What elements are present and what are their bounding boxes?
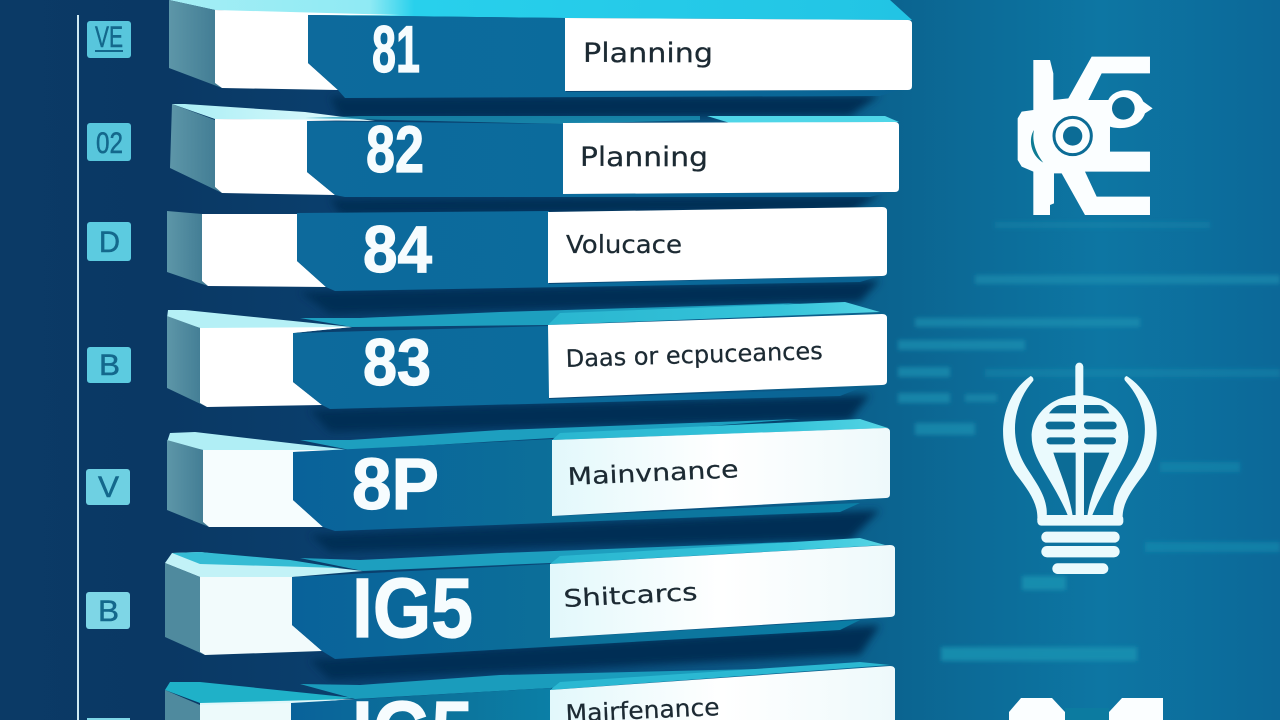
white left block: [203, 450, 350, 527]
blue number band: [292, 564, 860, 659]
icon tile 1: [87, 21, 131, 58]
label: Volucace: [566, 230, 682, 259]
white label panel: [552, 428, 890, 516]
white left block: [200, 703, 291, 720]
side face: [167, 440, 209, 527]
label: Planning: [583, 38, 713, 69]
side face: [167, 316, 207, 407]
bar 2: [170, 104, 899, 214]
icon tile 3: D: [99, 226, 120, 259]
side face: [165, 563, 205, 655]
icon: gear K-E mark: [1018, 57, 1153, 215]
icon tile 5: V: [98, 471, 119, 504]
icon tile 1: VE: [95, 21, 123, 54]
side face: [165, 690, 200, 720]
icon tile 2: 02: [96, 127, 123, 160]
bar 3: [167, 207, 887, 314]
white left block: [215, 119, 370, 195]
side face: [170, 104, 222, 193]
white label panel: [563, 122, 899, 194]
label: Daas or ecpuceances: [565, 337, 823, 373]
number: 83: [363, 325, 431, 399]
decorative blurred data lines: [898, 222, 1280, 661]
outer right arc: [1113, 376, 1157, 520]
blue number band: [293, 439, 860, 531]
blue number band: [293, 326, 860, 409]
label: Mainvnance: [567, 455, 739, 491]
bar 4: [167, 302, 887, 432]
icon tile 7: [87, 718, 130, 720]
bar 1: [169, 0, 912, 118]
side face: [167, 211, 208, 286]
icon tile 6: B: [98, 595, 119, 628]
white label panel: [550, 666, 895, 720]
blue number band: [297, 211, 880, 291]
white label panel: [548, 207, 887, 283]
icon tile 3: [87, 222, 131, 261]
number: 8P: [352, 445, 439, 525]
bulb body with slots: [1032, 395, 1128, 517]
white left block: [215, 10, 400, 90]
blue number band: [307, 121, 890, 197]
side face: [169, 0, 222, 88]
icon tile 4: [87, 347, 131, 383]
outer left arc: [1003, 376, 1047, 520]
icon tile 6: [86, 592, 130, 629]
timeline rule: [77, 15, 79, 720]
top face: [172, 104, 375, 121]
bar 5: [167, 419, 890, 552]
icon tile 4: B: [99, 349, 120, 382]
label: Shitcarcs: [563, 578, 698, 613]
top face: [165, 682, 355, 703]
top face: [169, 0, 912, 20]
number: 84: [363, 212, 432, 286]
white label panel: [550, 545, 895, 638]
white left block: [200, 327, 352, 407]
icon: light bulb: [1003, 363, 1157, 574]
icon tile 5: [86, 469, 130, 505]
blue number band: [291, 688, 551, 720]
blue number band: [308, 15, 900, 98]
top face: [167, 432, 350, 452]
top face: [167, 310, 352, 333]
white left block: [200, 577, 322, 655]
icon: partial emblem at bottom right: [1009, 698, 1163, 720]
white label panel: [565, 18, 912, 91]
number: 82: [366, 112, 424, 186]
number: IG5: [352, 561, 473, 655]
number: 81: [372, 12, 420, 86]
label: Planning: [580, 142, 708, 173]
stem: [1075, 363, 1083, 399]
white left block: [202, 214, 326, 287]
bar 6: [165, 538, 895, 680]
base: [1037, 515, 1123, 526]
bar 7: [165, 662, 895, 720]
top face: [165, 552, 363, 577]
icon tile 2: [87, 123, 131, 161]
white label panel: [548, 314, 887, 398]
